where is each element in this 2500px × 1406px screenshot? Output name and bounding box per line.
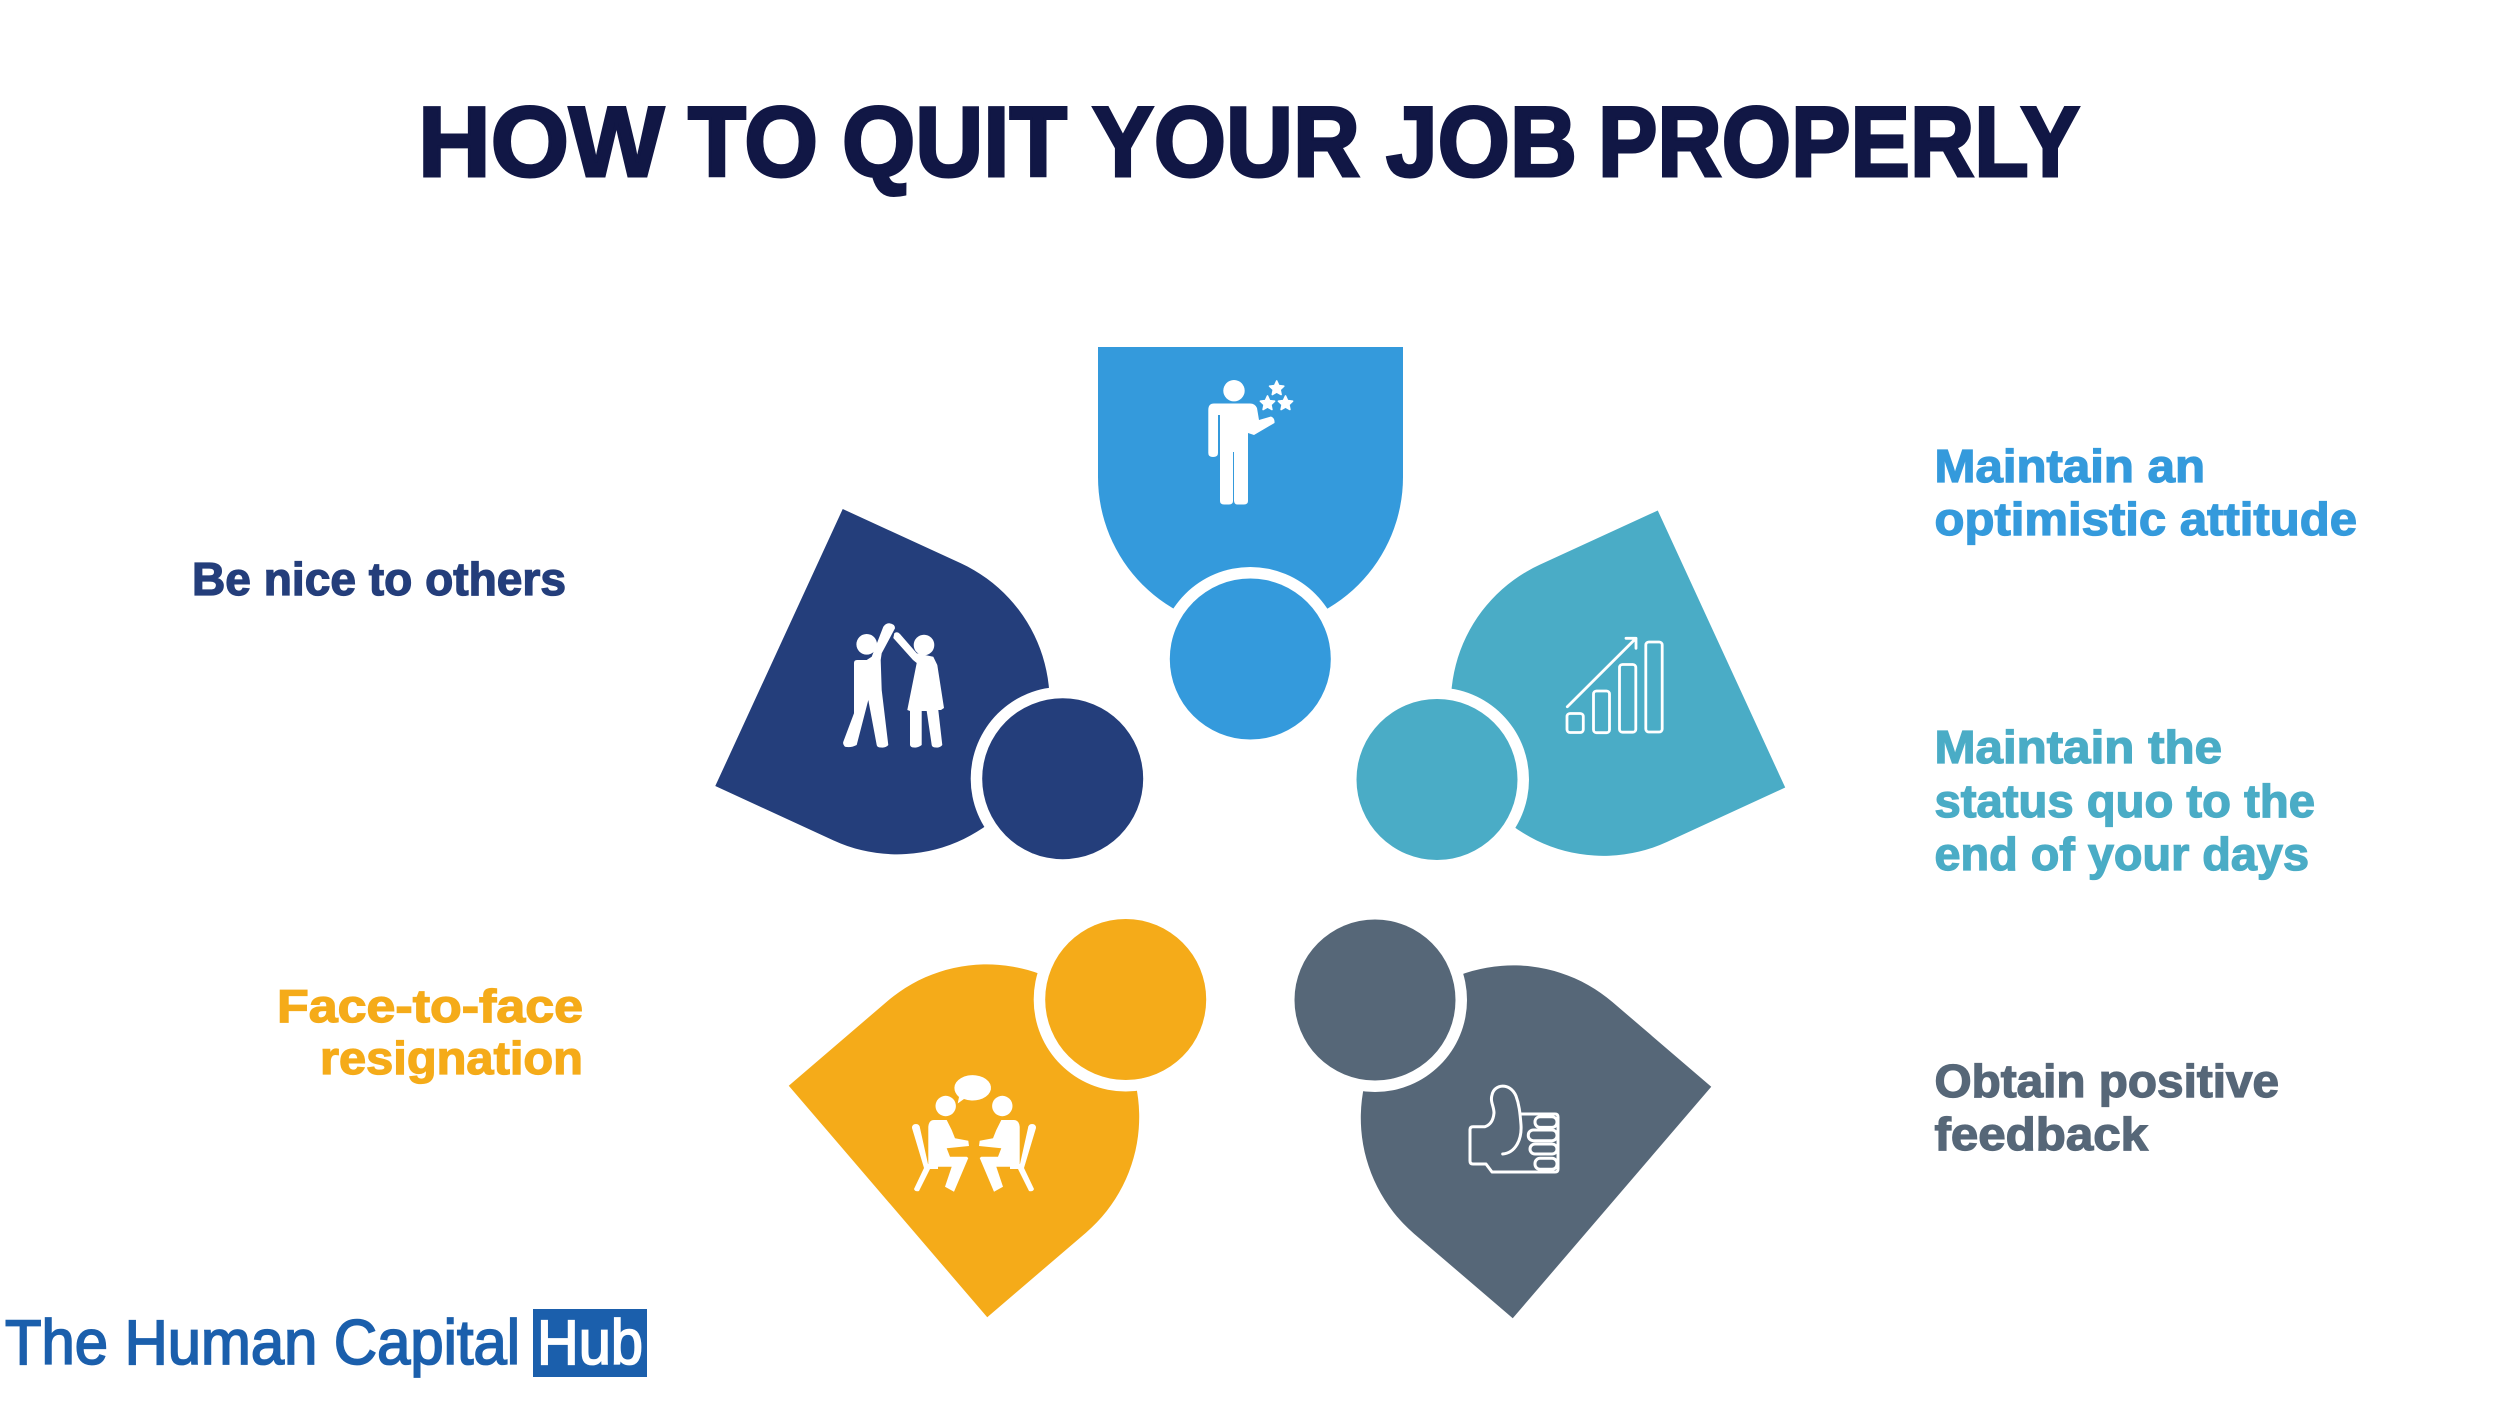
title: YOUR xyxy=(1092,86,1360,197)
circle: teal node xyxy=(1356,699,1518,860)
icon: person with three stars xyxy=(1208,380,1293,504)
label: maintain an optimistic attitude: Maintain an xyxy=(1934,440,2205,492)
title: JOB xyxy=(1386,86,1577,197)
label: maintain the status quo: Maintain the xyxy=(1934,721,2222,773)
label: obtain positive feedback: Obtain positive xyxy=(1934,1055,2279,1107)
title: QUIT xyxy=(842,86,1067,197)
label: maintain the status quo: end of your days xyxy=(1934,828,2309,880)
logo: The Human Capital Hub: The Human Capital xyxy=(5,1308,520,1378)
label: obtain positive feedback: feedback xyxy=(1934,1108,2148,1160)
label: maintain the status quo: status quo to the xyxy=(1934,775,2315,827)
circle: blue node xyxy=(1170,578,1331,740)
petal: obtain positive feedback (slate) xyxy=(1283,903,1711,1318)
label: maintain the status quo xyxy=(1934,721,2315,880)
circle: amber node xyxy=(1045,919,1206,1080)
circle: navy node xyxy=(982,698,1143,859)
label: be nice to others: Be nice to others xyxy=(192,553,566,605)
title: HOW xyxy=(418,86,665,197)
label: maintain an optimistic attitude xyxy=(1934,440,2357,545)
title xyxy=(418,86,2080,197)
petal: face-to-face resignation (amber) xyxy=(789,902,1218,1317)
title: PROPERLY xyxy=(1598,86,2080,197)
petal: maintain an optimistic attitude (blue) xyxy=(1098,347,1403,751)
icon: two people talking at table xyxy=(912,1075,1036,1192)
icon: rising bar chart with arrow xyxy=(1567,638,1662,733)
label: face-to-face resignation: resignation xyxy=(320,1032,583,1084)
icon: two people high-fiving xyxy=(843,623,944,748)
title: TO xyxy=(688,86,818,197)
label: maintain an optimistic attitude: optimistic attitude xyxy=(1934,493,2357,545)
logo: The Human Capital Hub: Hub xyxy=(537,1308,643,1378)
icon: thumbs up xyxy=(1470,1086,1558,1172)
label: face-to-face resignation xyxy=(277,980,583,1084)
petal: be nice to others (navy) xyxy=(715,509,1155,904)
label: face-to-face resignation: Face-to-face xyxy=(277,980,583,1032)
circle: slate node xyxy=(1294,920,1456,1080)
label: obtain positive feedback xyxy=(1934,1055,2279,1160)
petal: maintain the status quo (teal) xyxy=(1345,510,1785,906)
